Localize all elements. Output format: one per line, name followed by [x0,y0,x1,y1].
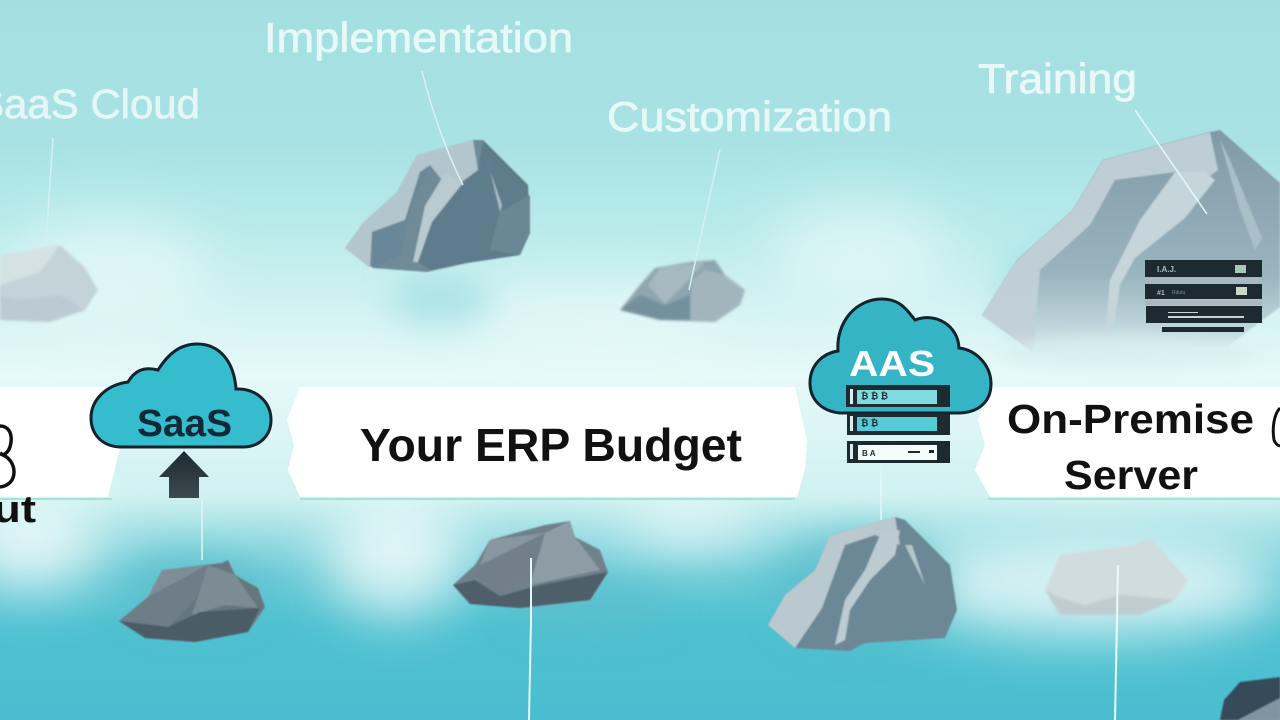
label: Customization: Customization [607,93,892,140]
banner: Your ERP Budget: Your ERP Budget [360,419,742,471]
rock: SaaS Cloud [0,245,98,322]
icon: SaaS cloud with upload arrow [91,344,271,498]
icon: SaaS cloud with server stack: B A [862,449,876,458]
icon: SaaS cloud with upload arrow: SaaS [137,403,232,445]
leader: Implementation [422,71,463,185]
rock: Training [982,130,1280,366]
banner: On-Premise Server: On-Premise [1007,396,1254,442]
panel: server rack on Training rock: I.A.J. [1157,265,1176,274]
rock: Implementation [345,140,530,272]
panel: server rack on Training rock: #1 [1157,290,1165,297]
leader: lower right rock [1115,565,1118,720]
label: Training: Training [978,55,1137,102]
banner: On-Premise Server: Server [1064,452,1198,498]
rock: lower middle-right [768,517,957,651]
leader: SaaS arrow to rock [201,500,203,560]
icon: SaaS cloud with server stack [810,299,991,463]
leader: Customization [689,149,720,290]
icon: SaaS cloud with server stack: ₿ ₿ ₿ [861,391,888,401]
panel: server rack on Training rock: Rdutu [1172,290,1186,296]
leader: lower centre rock [529,558,531,720]
background: mist clouds [0,200,1280,650]
rock: Customization [620,260,745,322]
rock: lower left [119,560,265,642]
banner: left fragment [0,387,122,531]
banner: Your ERP Budget [287,387,807,499]
rock: bottom-right corner [1220,677,1280,720]
label: SaaS Cloud [0,81,200,240]
leader: Training [1135,110,1207,214]
rock: lower right faded [1045,538,1188,615]
rock: lower centre [453,521,608,608]
icon: SaaS cloud with server stack: ₿ ₿ [861,418,878,428]
banner: On-Premise Server [975,387,1280,499]
label: Implementation: Implementation [264,14,573,61]
panel: server rack on Training rock [1145,260,1262,332]
icon: SaaS cloud with server stack: AAS [849,343,935,384]
leader: server to rock [880,465,882,520]
